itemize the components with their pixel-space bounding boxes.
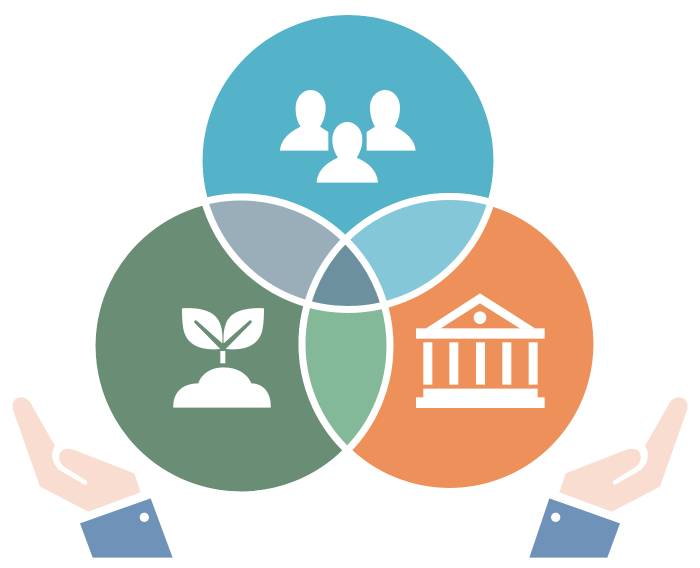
venn diagram xyxy=(92,12,597,495)
left cuff button xyxy=(140,513,149,522)
hand: right xyxy=(529,397,688,558)
right cuff button xyxy=(551,513,560,522)
pediment circle xyxy=(474,311,486,324)
roof pediment xyxy=(426,293,535,328)
overlap: top and right xyxy=(350,200,486,301)
stepped base xyxy=(416,389,545,408)
soil mound xyxy=(173,367,271,408)
hand: left xyxy=(12,397,173,558)
icon: classical building xyxy=(416,293,545,408)
left palm xyxy=(12,397,141,512)
stem xyxy=(220,351,225,363)
overlap: left and right xyxy=(306,308,386,446)
leaf: right xyxy=(224,308,264,349)
icon: three people xyxy=(280,90,416,183)
columns xyxy=(423,342,538,385)
person: front xyxy=(317,122,378,183)
entablature xyxy=(416,328,545,339)
overlap: center xyxy=(312,244,380,306)
left cuff xyxy=(80,498,173,558)
person: back right xyxy=(367,90,416,151)
circle: left green xyxy=(92,197,390,495)
circle: top teal xyxy=(199,12,497,310)
circle outlines xyxy=(92,12,597,495)
person: back left xyxy=(280,90,328,151)
right cuff xyxy=(529,498,620,558)
overlap: top and left xyxy=(209,200,340,300)
circle: right orange xyxy=(302,196,597,492)
right palm xyxy=(559,397,688,512)
leaf: left xyxy=(182,308,222,349)
icon: sprout xyxy=(173,308,271,408)
